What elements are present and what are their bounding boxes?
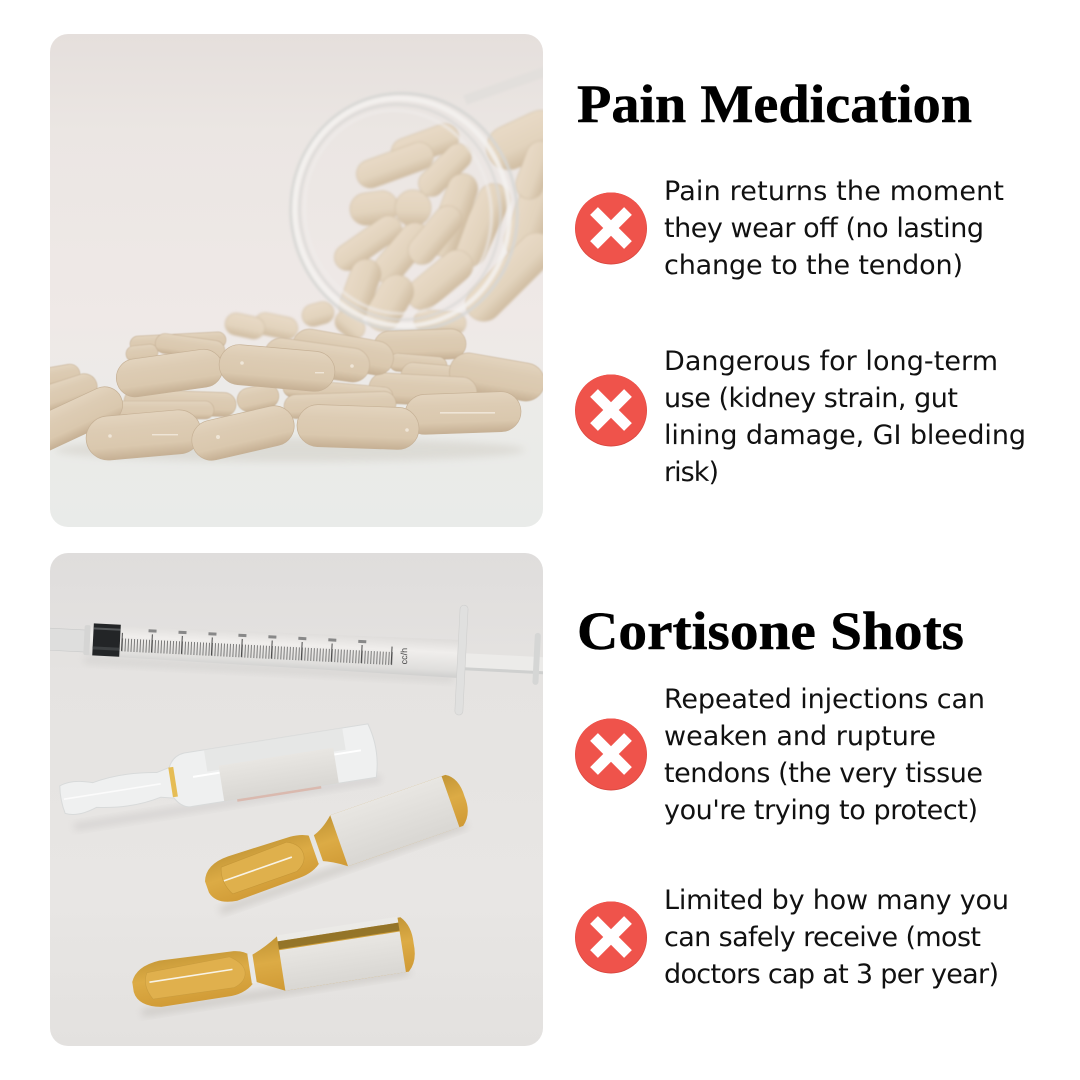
illustration: amber ampoule bottom: [129, 915, 418, 1017]
text: first pain medication point: change to the tendon): [664, 250, 963, 281]
text: second cortisone point: [664, 885, 1009, 990]
icon: red x one: [575, 192, 647, 264]
text: second cortisone point: Limited by how many you: [664, 885, 1009, 916]
text: second pain medication point: Dangerous for long-term: [664, 346, 998, 377]
illustration: glass jar rim: [289, 92, 518, 330]
text: first cortisone point: weaken and rupture: [664, 721, 936, 752]
syringe scale label: cc/h: [399, 648, 409, 664]
heading: Cortisone Shots: Cortisone Shots: [577, 601, 964, 661]
text: first pain medication point: [664, 176, 1004, 281]
icon: red x four: [575, 902, 647, 974]
illustration: capsule pile on the table: [17, 326, 548, 464]
illustration: capsules inside the jar: [224, 109, 543, 340]
text: second pain medication point: risk): [664, 457, 719, 488]
illustration: clear ampoule: [57, 723, 381, 831]
text: first cortisone point: [664, 684, 985, 826]
illustration: syringe: [50, 605, 543, 716]
text: first pain medication point: Pain returns the moment: [664, 176, 1004, 207]
text: second pain medication point: lining damage, GI bleeding: [664, 420, 1026, 451]
panel: pain medication photo: [50, 34, 543, 527]
heading: Pain Medication: Pain Medication: [577, 74, 972, 134]
icon: red x two: [575, 374, 647, 446]
text: second cortisone point: doctors cap at 3 per year): [664, 959, 999, 990]
text: first cortisone point: tendons (the very tissue: [664, 758, 983, 789]
text: second pain medication point: [664, 346, 1026, 488]
text: second cortisone point: can safely receive (most: [664, 922, 981, 953]
illustration: amber ampoule middle: [198, 771, 475, 915]
text: second pain medication point: use (kidney strain, gut: [664, 383, 958, 414]
panel: cortisone shots photo: [42, 553, 553, 1046]
text: first cortisone point: Repeated injections can: [664, 684, 985, 715]
text: first cortisone point: you're trying to protect): [664, 795, 978, 826]
text: first pain medication point: they wear off (no lasting: [664, 213, 984, 244]
icon: red x three: [575, 718, 647, 790]
